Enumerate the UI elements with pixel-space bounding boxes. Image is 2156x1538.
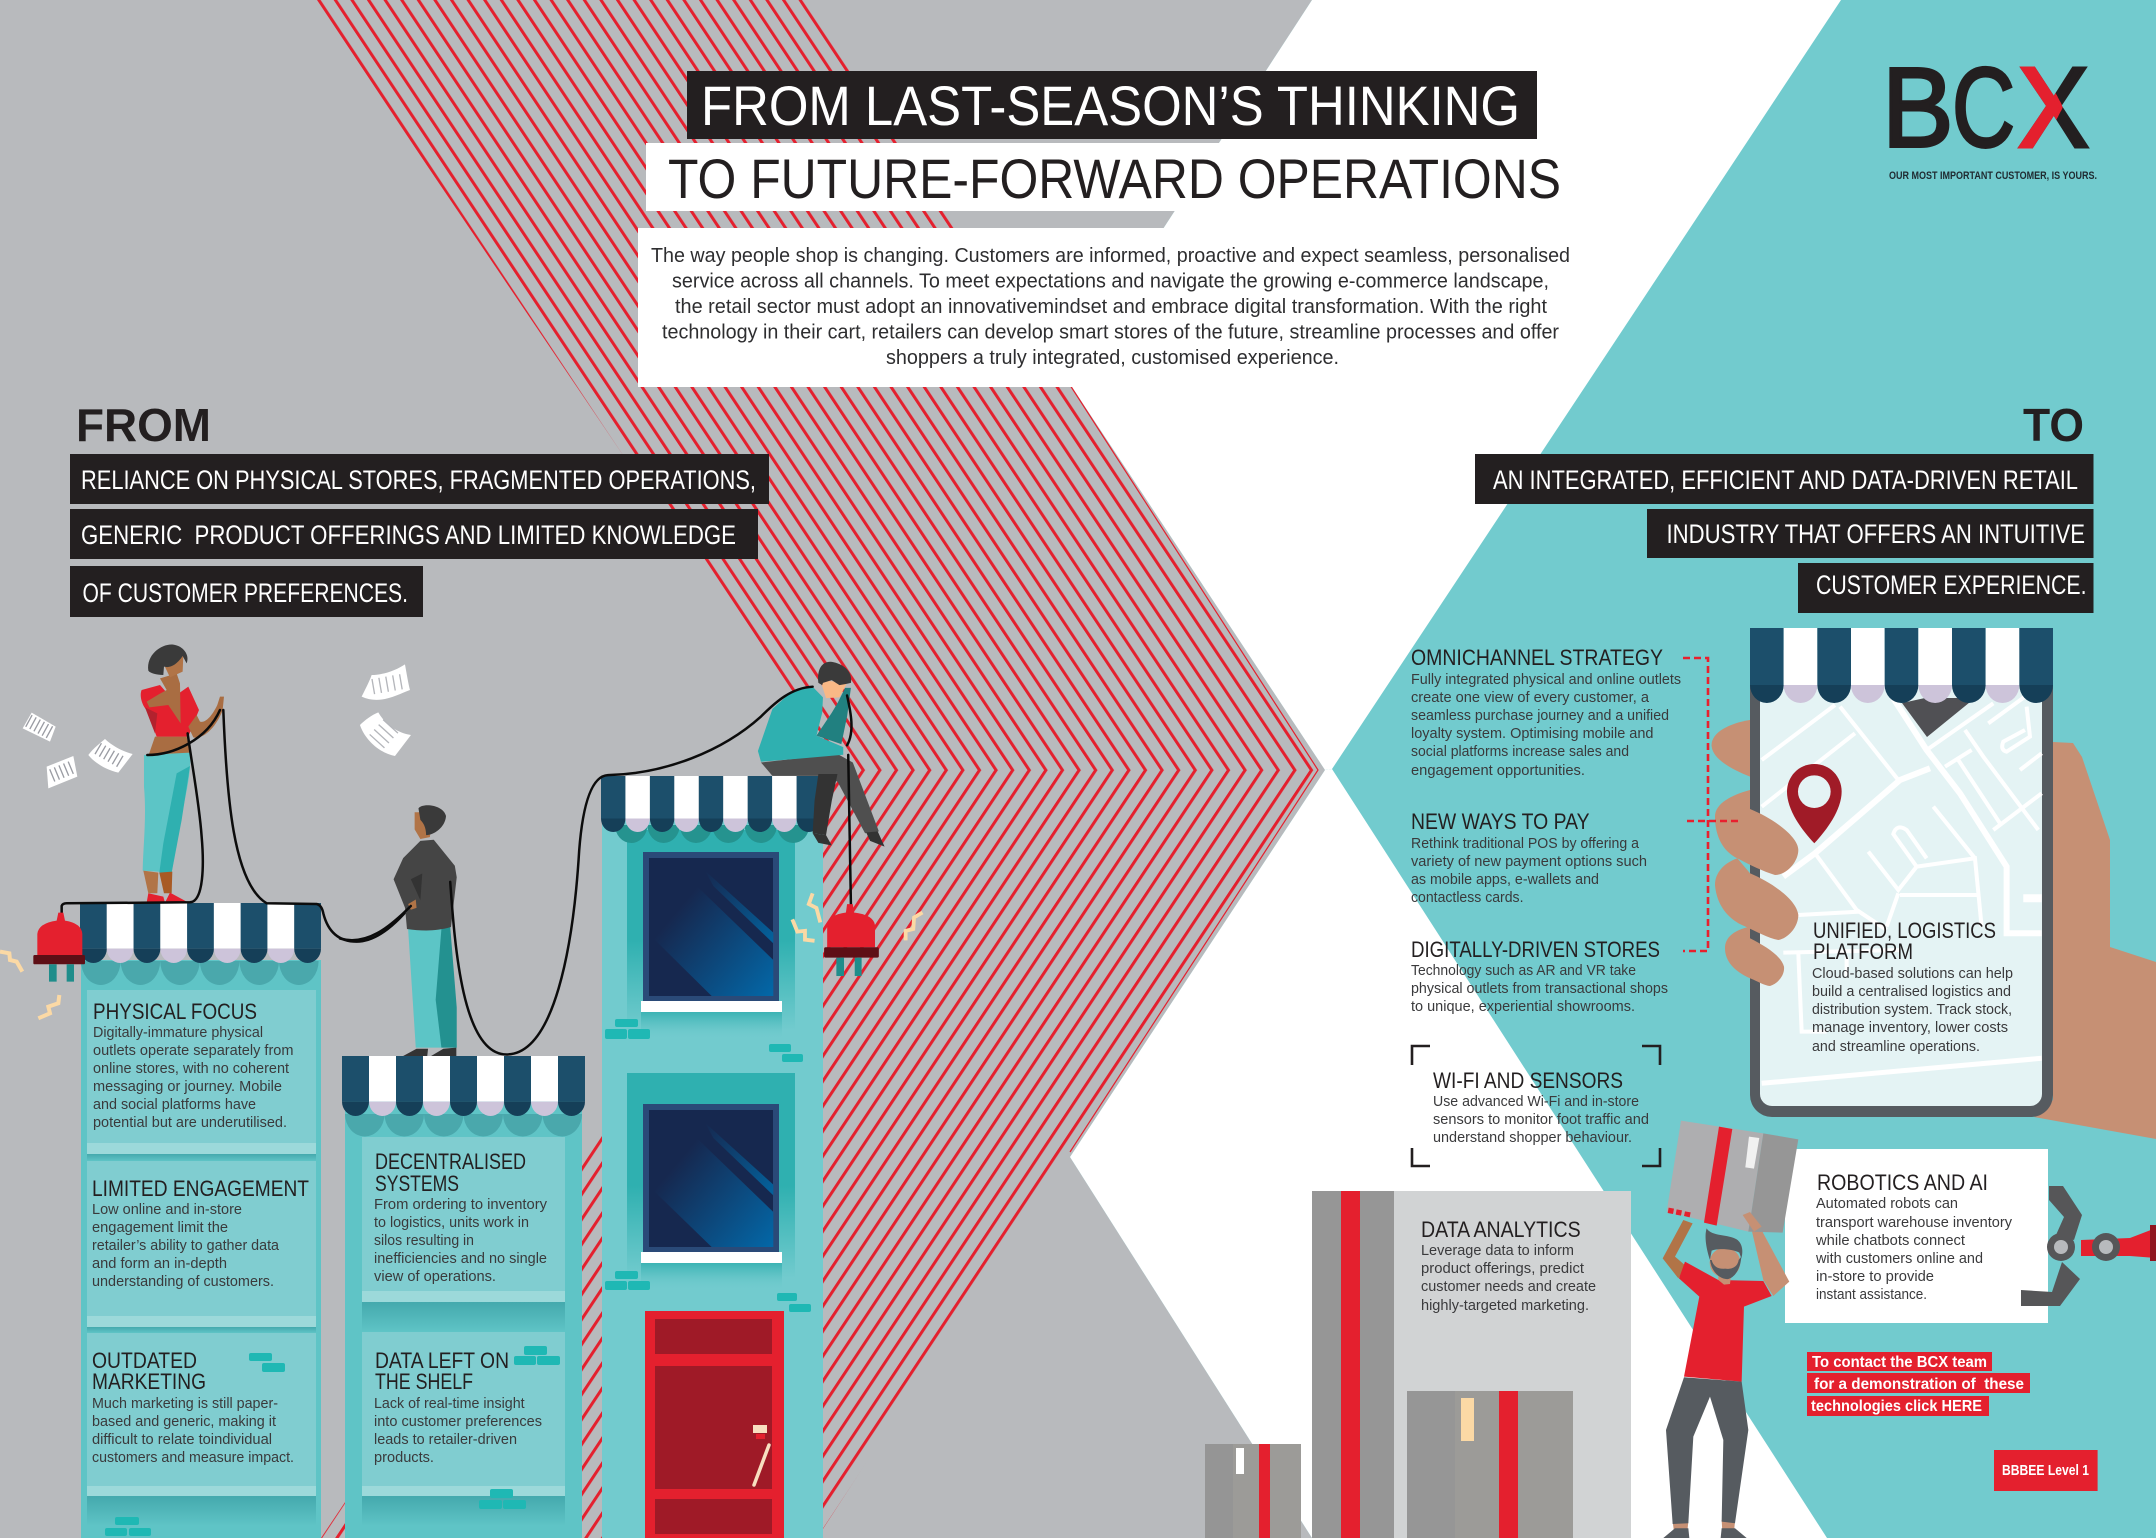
- text: omnichannel strategy: loyalty system. Optimising mobile and: [1411, 726, 1654, 742]
- card: decentralised systems: DECENTRALISED: [375, 1149, 526, 1174]
- card: physical focus: potential but are underutilised.: [93, 1115, 287, 1131]
- card: physical focus: Digitally-immature physical: [93, 1025, 263, 1041]
- card: decentralised systems: From ordering to inventory: [374, 1197, 548, 1213]
- BCX logo: B: [1882, 44, 1954, 170]
- BCX logo: OUR MOST IMPORTANT CUSTOMER, IS YOURS.: [1889, 170, 2097, 182]
- BBBEE badge: [1994, 1450, 2098, 1491]
- hand: palm: [2034, 742, 2156, 1139]
- bricks: [605, 1019, 811, 1312]
- under-awning scallops: [81, 961, 319, 985]
- card: data left on the shelf: [362, 1332, 565, 1526]
- upper window: [615, 825, 809, 1040]
- lower window: [627, 1073, 795, 1291]
- card: outdated marketing: customers and measure impact.: [92, 1450, 294, 1466]
- card: decentralised systems: view of operations.: [374, 1269, 496, 1285]
- panel: robotics and AI: with customers online and: [1815, 1251, 1983, 1267]
- panel: robotics and AI: transport warehouse inventory: [1816, 1215, 2013, 1231]
- flying papers: [23, 664, 411, 788]
- red door: [645, 1311, 784, 1538]
- hand: fingers: [1712, 720, 1798, 986]
- text: wi-fi and sensors with brackets: sensors to monitor foot traffic and: [1433, 1112, 1649, 1128]
- sitting man: [758, 662, 885, 847]
- head: [1706, 1228, 1742, 1285]
- building 3: [601, 776, 823, 1538]
- text: omnichannel strategy: [1411, 645, 1681, 779]
- card: data left on the shelf: DATA LEFT ON: [375, 1348, 509, 1373]
- intro paragraph: shoppers a truly integrated, customised experience.: [886, 347, 1339, 369]
- standing man: [394, 805, 457, 1056]
- map pin: [1787, 764, 1842, 843]
- card: decentralised systems: [362, 1137, 565, 1332]
- text: omnichannel strategy: OMNICHANNEL STRATEGY: [1411, 645, 1663, 670]
- parcel: [1667, 1121, 1798, 1233]
- card: decentralised systems: silos resulting in: [374, 1233, 474, 1249]
- text: wi-fi and sensors with brackets: Use advanced Wi-Fi and in-store: [1433, 1094, 1639, 1110]
- legs: [1666, 1377, 1748, 1524]
- robot arm: [2021, 1186, 2156, 1306]
- FROM statement: [70, 454, 769, 617]
- text: omnichannel strategy: engagement opportunities.: [1411, 763, 1585, 779]
- card: physical focus: online stores, with no coherent: [93, 1061, 289, 1077]
- sparks: [792, 893, 922, 941]
- title block: FROM LAST-SEASON’S THINKING: [701, 74, 1520, 137]
- intro paragraph: [638, 228, 1575, 387]
- awning: [601, 776, 821, 832]
- ankles: [1673, 1520, 1735, 1532]
- cables: [340, 687, 851, 1054]
- card: outdated marketing: OUTDATED: [92, 1348, 197, 1373]
- FROM heading: FROM: [76, 399, 211, 451]
- card: decentralised systems: to logistics, units work in: [374, 1215, 529, 1231]
- text: unified logistics platform: and streamline operations.: [1812, 1039, 1980, 1055]
- card: limited engagement: LIMITED ENGAGEMENT: [92, 1176, 309, 1201]
- plug: [824, 904, 879, 976]
- card: limited engagement: retailer’s ability to gather data: [92, 1238, 280, 1254]
- card: physical focus: [87, 990, 316, 1161]
- hand: [1743, 1212, 1762, 1232]
- notch: [1902, 698, 1975, 737]
- screen map: [1760, 650, 2042, 1106]
- text: unified logistics platform: build a centralised logistics and: [1812, 984, 2011, 1000]
- title block: [646, 71, 1570, 211]
- tall box: [1312, 1191, 1394, 1538]
- text: omnichannel strategy: Fully integrated physical and online outlets: [1411, 672, 1681, 688]
- BCX logo: C: [1952, 44, 2015, 170]
- awning: [80, 903, 321, 963]
- text: data analytics: [1421, 1217, 1596, 1314]
- text: digitally-driven stores: to unique, experiential showrooms.: [1411, 999, 1635, 1015]
- plug: [33, 913, 85, 982]
- panel: robotics and AI: [1785, 1149, 2048, 1323]
- text: unified logistics platform: [1812, 918, 2013, 1055]
- red dashed connector: [1683, 658, 1742, 951]
- text: wi-fi and sensors with brackets: WI-FI AND SENSORS: [1433, 1068, 1623, 1093]
- text: data analytics: Leverage data to inform: [1421, 1243, 1574, 1259]
- bricks: [479, 1346, 560, 1509]
- data analytics panel with boxes: [1205, 1191, 1631, 1538]
- card: outdated marketing: MARKETING: [92, 1369, 206, 1394]
- background: grey chevron field: [0, 0, 1325, 1538]
- text: omnichannel strategy: create one view of every customer, a: [1411, 690, 1650, 706]
- card: limited engagement: Low online and in-store: [92, 1202, 242, 1218]
- front box: [1407, 1391, 1573, 1538]
- phone body: [1750, 650, 2053, 1117]
- BCX logo: X: [2018, 44, 2088, 170]
- call to action: [1807, 1352, 2030, 1416]
- card: outdated marketing: based and generic, making it: [92, 1414, 276, 1430]
- panel: robotics and AI: while chatbots connect: [1815, 1233, 1965, 1249]
- card: limited engagement: understanding of customers.: [92, 1274, 274, 1290]
- text: omnichannel strategy: seamless purchase journey and a unified: [1411, 708, 1669, 724]
- text: digitally-driven stores: physical outlets from transactional shops: [1411, 981, 1668, 997]
- card: outdated marketing: [87, 1333, 316, 1526]
- background: lower white wedge: [1070, 769, 1827, 1538]
- card: physical focus: and social platforms have: [93, 1097, 256, 1113]
- FROM statement: GENERIC PRODUCT OFFERINGS AND LIMITED KNOWLEDGE: [81, 520, 736, 550]
- text: data analytics: product offerings, predict: [1421, 1261, 1584, 1277]
- background: upper white wedge: [1066, 0, 1841, 770]
- text: data analytics: DATA ANALYTICS: [1421, 1217, 1581, 1242]
- card: limited engagement: and form an in-depth: [92, 1256, 227, 1272]
- card: decentralised systems: inefficiencies and no single: [374, 1251, 547, 1267]
- BCX logo: X: [2018, 44, 2088, 170]
- text: digitally-driven stores: [1411, 937, 1668, 1015]
- small box: [1205, 1444, 1301, 1538]
- shoes: [1663, 1528, 1747, 1538]
- awning: [342, 1056, 585, 1116]
- FROM statement: OF CUSTOMER PREFERENCES.: [82, 578, 408, 608]
- text: data analytics: highly-targeted marketing.: [1421, 1298, 1589, 1314]
- text: new ways to pay: as mobile apps, e-wallets and: [1411, 872, 1599, 888]
- card: limited engagement: engagement limit the: [92, 1220, 228, 1236]
- panel: robotics and AI: ROBOTICS AND AI: [1817, 1170, 1988, 1195]
- text: wi-fi and sensors with brackets: understand shopper behaviour.: [1433, 1130, 1632, 1146]
- text: new ways to pay: NEW WAYS TO PAY: [1411, 809, 1590, 834]
- bricks: [105, 1353, 285, 1536]
- text: new ways to pay: contactless cards.: [1411, 890, 1524, 906]
- TO statement: CUSTOMER EXPERIENCE.: [1816, 570, 2086, 600]
- call to action: To contact the BCX team: [1812, 1354, 1987, 1371]
- card: data left on the shelf: Lack of real-time insight: [374, 1396, 525, 1412]
- card: outdated marketing: difficult to relate toindividual: [92, 1432, 272, 1448]
- figure: standing man and cable to sitting man: [340, 662, 922, 1056]
- text: unified logistics platform: manage inventory, lower costs: [1812, 1020, 2008, 1036]
- cables: [62, 710, 412, 942]
- text: new ways to pay: Rethink traditional POS by offering a: [1411, 836, 1640, 852]
- text: unified logistics platform: Cloud-based solutions can help: [1812, 966, 2013, 982]
- text: wi-fi and sensors with brackets: [1412, 1046, 1660, 1166]
- text: unified logistics platform: distribution system. Track stock,: [1812, 1002, 2012, 1018]
- card: data left on the shelf: products.: [374, 1450, 434, 1466]
- panel: robotics and AI: instant assistance.: [1816, 1287, 1927, 1303]
- card: decentralised systems: SYSTEMS: [375, 1171, 459, 1196]
- phone with hand and map: [1712, 628, 2156, 1139]
- text: omnichannel strategy: social platforms increase sales and: [1411, 744, 1629, 760]
- card: outdated marketing: Much marketing is still paper-: [92, 1396, 278, 1412]
- figure: woman holding cable with plug and flying papers: [0, 645, 412, 1018]
- text: unified logistics platform: UNIFIED, LOGISTICS: [1813, 918, 1996, 943]
- intro paragraph: technology in their cart, retailers can develop smart stores of the future, streamline processes and offer: [662, 322, 1559, 344]
- card: data left on the shelf: THE SHELF: [375, 1369, 473, 1394]
- sparks: [0, 952, 59, 1018]
- text: new ways to pay: variety of new payment options such: [1411, 854, 1647, 870]
- call to action: technologies click HERE: [1811, 1398, 1982, 1415]
- shirt: [1679, 1262, 1772, 1382]
- TO heading: TO: [2023, 399, 2084, 451]
- BCX logo: [1889, 66, 2096, 181]
- intro paragraph: service across all channels. To meet expectations and navigate the growing e-commerce landscape,: [672, 270, 1549, 292]
- under-awning scallops: [345, 1114, 582, 1136]
- text: new ways to pay: [1411, 809, 1647, 906]
- text: data analytics: customer needs and create: [1421, 1279, 1596, 1295]
- BBBEE badge: BBBEE Level 1: [2002, 1462, 2089, 1479]
- TO statement: [1475, 454, 2094, 613]
- intro paragraph: The way people shop is changing. Customers are informed, proactive and expect seamless, personalised: [651, 245, 1570, 267]
- text: unified logistics platform: PLATFORM: [1813, 939, 1913, 964]
- card: data left on the shelf: into customer preferences: [374, 1414, 542, 1430]
- arms: [1663, 1213, 1789, 1296]
- card: data left on the shelf: leads to retailer-driven: [374, 1432, 517, 1448]
- intro paragraph: the retail sector must adopt an innovativemindset and embrace digital transformation. With the right: [675, 296, 1547, 318]
- panel: robotics and AI: in-store to provide: [1816, 1269, 1934, 1285]
- panel: robotics and AI: Automated robots can: [1816, 1196, 1958, 1212]
- title block: TO FUTURE-FORWARD OPERATIONS: [668, 147, 1561, 210]
- card: physical focus: PHYSICAL FOCUS: [93, 999, 257, 1024]
- card: physical focus: messaging or journey. Mobile: [93, 1079, 282, 1095]
- text: digitally-driven stores: DIGITALLY-DRIVEN STORES: [1411, 937, 1660, 962]
- text: digitally-driven stores: Technology such as AR and VR take: [1411, 963, 1636, 979]
- woman: [141, 645, 224, 903]
- card: limited engagement: [87, 1161, 316, 1333]
- building 2: [342, 1056, 585, 1538]
- figure: man lifting parcel: [1663, 1121, 1798, 1538]
- tall panel: [1394, 1191, 1631, 1538]
- call to action: for a demonstration of these: [1814, 1376, 2024, 1393]
- building 1: [80, 903, 321, 1538]
- card: physical focus: outlets operate separately from: [93, 1043, 294, 1059]
- awning: [1750, 628, 2053, 703]
- red chevron stripes: [315, 0, 1318, 1538]
- FROM statement: RELIANCE ON PHYSICAL STORES, FRAGMENTED OPERATIONS,: [81, 465, 756, 495]
